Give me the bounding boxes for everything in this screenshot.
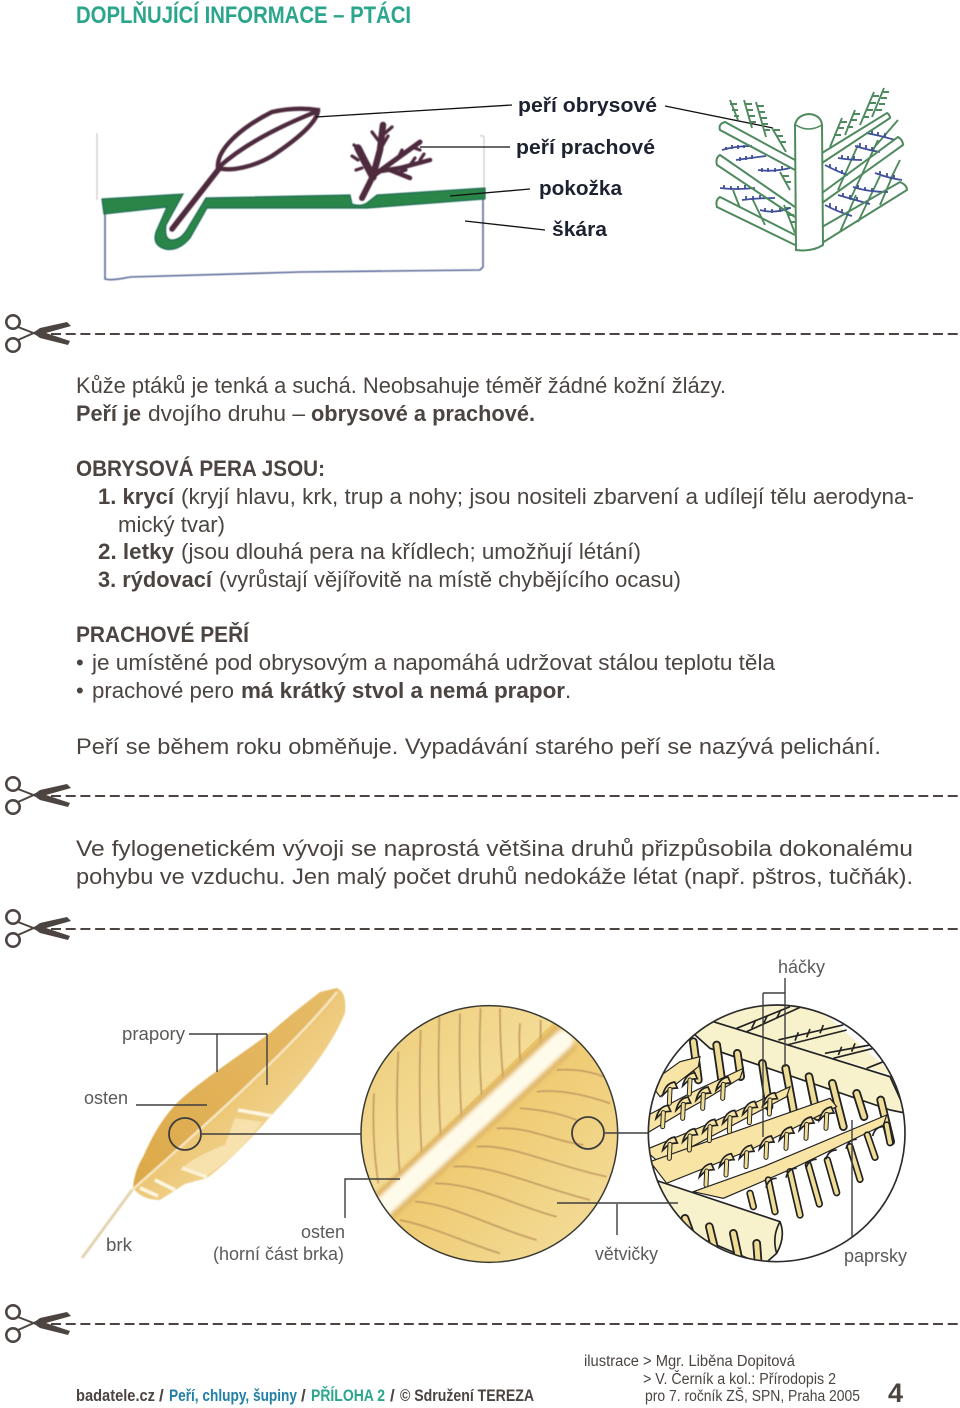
footer: source line: © Sdružení TEREZA: [400, 1386, 534, 1405]
labels: feather illustration: osten: [84, 1088, 128, 1108]
footer: credits: ilustrace > Mgr. Liběna Dopitová: [584, 1353, 795, 1370]
text block: phylogeny: [76, 836, 913, 889]
illustration: whole feather: [82, 988, 345, 1258]
skin layer: [102, 188, 485, 250]
down feather: [352, 125, 430, 198]
upper parallel strips: [716, 1006, 890, 1074]
green barbules: [730, 88, 900, 233]
labels: feather illustration: (horní část brka): [213, 1244, 344, 1264]
text block: down feathers: je umístěné pod obrysovým a napomáhá udržovat stálou teplotu těla: [91, 650, 776, 675]
hanging pegs: [693, 1042, 891, 1142]
text block: down feathers: •: [76, 678, 84, 703]
contour feather: [172, 109, 318, 229]
divider: scissors 2: [6, 777, 958, 814]
shaft: [795, 114, 823, 250]
diagram: skin cross-section: [97, 109, 485, 280]
text block: skin and feathers intro: Peří je: [76, 401, 141, 426]
text block: moulting: Peří se během roku obměňuje. Vypadávání starého peří se nazývá pelichání.: [76, 734, 881, 759]
hooks: [656, 1073, 834, 1185]
text block: phylogeny: pohybu ve vzduchu. Jen malý počet druhů nedokáže létat (např. pštros, tučňák).: [76, 864, 913, 889]
labels: skin diagram: [516, 95, 657, 241]
text block: contour feathers: 1. krycí: [98, 484, 175, 509]
footer: credits: [584, 1353, 860, 1405]
text block: contour feathers: [76, 456, 914, 592]
blue barbules: [720, 130, 902, 216]
text block: contour feathers: 3. rýdovací: [98, 567, 213, 592]
text block: phylogeny: Ve fylogenetickém vývoji se naprostá většina druhů přizpůsobila dokonalému: [76, 836, 913, 861]
text block: contour feathers: OBRYSOVÁ PERA JSOU:: [76, 456, 325, 481]
labels: skin diagram: peří obrysové: [518, 95, 657, 117]
text block: down feathers: [76, 622, 776, 703]
text block: contour feathers: 2. letky: [98, 539, 175, 564]
page number: 4: [888, 1378, 903, 1408]
footer: source line: /: [159, 1386, 164, 1405]
footer: source line: /: [390, 1386, 395, 1405]
footer: source line: badatele.cz: [76, 1386, 155, 1405]
leader lines: feather illustration: [136, 978, 852, 1237]
text block: contour feathers: (vyrůstají vějířovitě na místě chybějícího ocasu): [219, 567, 681, 592]
text block: contour feathers: mický tvar): [118, 512, 225, 537]
text block: skin and feathers intro: [76, 373, 726, 426]
title: DOPLŇUJÍCÍ INFORMACE – PTÁCI: [76, 1, 411, 29]
text block: down feathers: •: [76, 650, 84, 675]
text block: contour feathers: (jsou dlouhá pera na křídlech; umožňují létání): [181, 539, 641, 564]
labels: feather illustration: větvičky: [595, 1244, 658, 1264]
text block: skin and feathers intro: obrysové a prachové.: [311, 401, 535, 426]
footer: source line: Peří, chlupy, šupiny: [169, 1386, 297, 1405]
text block: skin and feathers intro: Kůže ptáků je tenká a suchá. Neobsahuje téměř žádné kožní žlázy.: [76, 373, 726, 398]
labels: skin diagram: peří prachové: [516, 137, 655, 159]
text block: down feathers: .: [565, 678, 571, 703]
barbs: [716, 113, 907, 245]
lower free pegs: [750, 1125, 890, 1215]
diagram: feather structure detail: [716, 88, 907, 250]
footer: credits: pro 7. ročník ZŠ, SPN, Praha 2005: [645, 1388, 860, 1405]
divider: scissors 1: [6, 315, 958, 352]
labels: feather illustration: háčky: [778, 957, 825, 977]
jagged yellow strips: [645, 1057, 887, 1198]
divider: scissors 4: [6, 1305, 958, 1342]
footer: credits: > V. Černík a kol.: Přírodopis 2: [643, 1371, 836, 1388]
text block: down feathers: má krátký stvol a nemá prapor: [241, 678, 565, 703]
text block: down feathers: prachové pero: [92, 678, 234, 703]
illustration: magnified vane: [357, 1000, 620, 1265]
wide barb lower: [655, 1180, 782, 1265]
labels: feather illustration: paprsky: [844, 1246, 907, 1266]
text block: down feathers: PRACHOVÉ PEŘÍ: [76, 622, 250, 647]
footer: source line: /: [301, 1386, 306, 1405]
footer: source line: PŘÍLOHA 2: [311, 1386, 385, 1405]
labels: feather illustration: brk: [106, 1235, 133, 1255]
labels: feather illustration: osten: [301, 1222, 345, 1242]
labels: feather illustration: prapory: [122, 1024, 185, 1044]
text block: contour feathers: (kryjí hlavu, krk, trup a nohy; jsou nositeli zbarvení a udílejí tělu aerodyna-: [181, 484, 914, 509]
illustration: magnified barbs and hooks: [645, 1000, 910, 1267]
text block: skin and feathers intro: dvojího druhu –: [148, 401, 306, 426]
divider: scissors 3: [6, 910, 958, 947]
leader lines: skin diagram: [316, 105, 773, 230]
labels: skin diagram: škára: [552, 219, 608, 241]
wide barb upper: [693, 1022, 907, 1113]
labels: skin diagram: pokožka: [539, 178, 623, 200]
labels: feather illustration: [84, 957, 907, 1266]
footer: source line: [76, 1386, 534, 1405]
